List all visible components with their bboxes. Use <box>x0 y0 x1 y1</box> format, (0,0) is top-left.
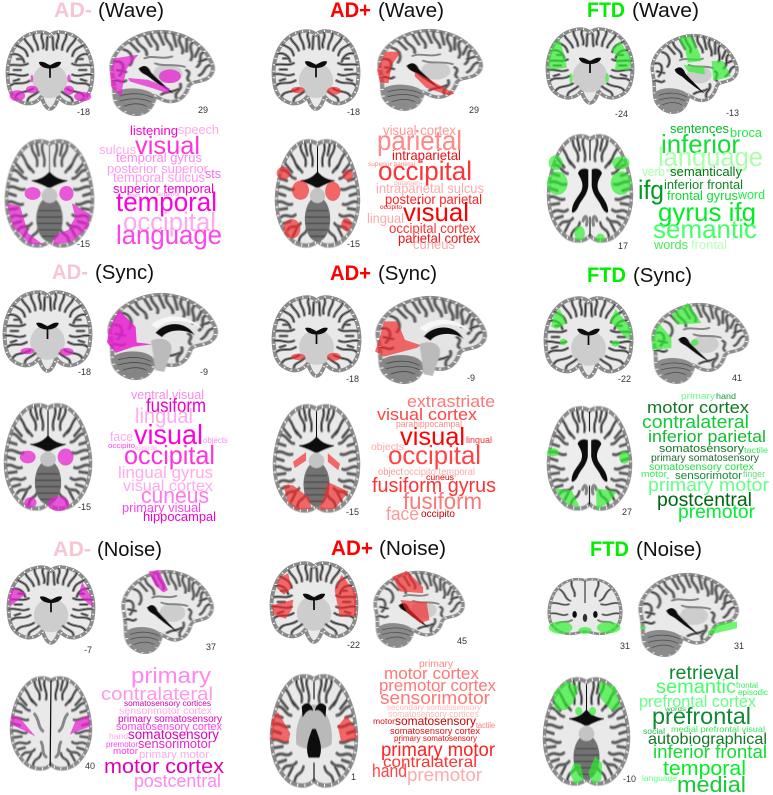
word cloud: FTD Wave: semantically <box>670 164 742 179</box>
word cloud: AD- Noise: contralateral <box>101 683 213 704</box>
word cloud: AD- Wave: occipital <box>123 207 216 237</box>
brain slice: sagittal -9: -9 <box>467 373 475 383</box>
word cloud: AD+ Noise: premotor cortex <box>379 676 496 695</box>
brain slice: sagittal 45 <box>375 571 467 646</box>
word cloud: AD- Sync: occipito <box>108 443 135 450</box>
panel: AD+ Noise <box>271 537 496 785</box>
word cloud: AD+ Noise: somatosensory cortices <box>388 709 479 719</box>
word cloud: FTD Noise: temporal <box>663 758 746 780</box>
brain slice: sagittal 29: 29 <box>198 105 208 115</box>
word cloud: FTD Wave: words <box>653 237 688 252</box>
word cloud: AD+ Wave: posterior parietal <box>385 191 482 207</box>
word cloud: AD+ Noise: motor cortex <box>384 664 479 683</box>
word cloud: AD+ Sync: occipital <box>388 440 481 470</box>
brain slice: coronal -18: -18 <box>346 374 359 384</box>
word cloud: FTD Wave: frontal gyrus <box>667 188 738 203</box>
brain slice: coronal 31: 31 <box>620 641 630 651</box>
brain slice: sagittal 29: 29 <box>469 105 479 115</box>
word cloud: FTD Noise: frontal <box>736 681 758 690</box>
brain slice: sagittal -13: -13 <box>726 108 739 118</box>
word cloud: AD- Sync: primary visual <box>122 500 201 515</box>
brain slice: axial 17: 17 <box>618 241 628 251</box>
brain slice: coronal -18: -18 <box>78 367 91 377</box>
word cloud: AD+ Wave: lingual <box>367 210 404 226</box>
word cloud: FTD Sync: motor cortex <box>647 398 750 417</box>
word cloud: AD- Sync: episodic <box>135 446 157 452</box>
word cloud: AD- Sync: objects <box>203 436 228 445</box>
brain slice: sagittal 41 <box>652 303 747 383</box>
heading: AD- (Noise) <box>53 538 162 561</box>
panel: FTD Noise <box>544 538 768 795</box>
brain slice: sagittal -9: -9 <box>200 367 208 377</box>
word cloud: AD+ Sync: visual cortex <box>377 405 478 424</box>
word cloud: AD- Sync: lingual <box>135 405 193 428</box>
heading: AD- (Sync): AD- <box>52 261 88 284</box>
brain slice: coronal -18: -18 <box>347 107 360 117</box>
word cloud: AD+ Noise: premotor <box>407 765 482 785</box>
word cloud: AD- Noise: motor cortex <box>104 756 224 778</box>
word cloud: AD- Sync <box>108 387 228 524</box>
word cloud: AD- Wave: posterior superior <box>107 161 209 176</box>
word cloud: AD+ Noise: primary somatosensory <box>394 734 477 743</box>
word cloud: AD+ Wave: superior parietal <box>368 162 415 168</box>
panel: FTD Wave <box>547 0 765 252</box>
word cloud: AD+ Wave: putamen <box>394 181 420 187</box>
brain slice: coronal -22 <box>272 563 360 650</box>
word cloud: FTD Noise: words <box>664 706 687 713</box>
brain slice: sagittal 37 <box>123 570 216 652</box>
panel: FTD Sync <box>546 264 769 523</box>
word cloud: AD- Noise: primary <box>131 663 212 688</box>
brain slice: coronal -18 <box>5 292 91 377</box>
word cloud: AD- Sync: occipital <box>124 440 215 470</box>
word cloud: AD+ Noise: primary motor <box>381 740 496 761</box>
word cloud: AD- Sync: face <box>110 429 133 444</box>
heading: AD+ (Sync) <box>330 262 437 285</box>
brain slice: coronal -18: -18 <box>77 107 90 117</box>
brain slice: sagittal 45: 45 <box>457 636 467 646</box>
panel: AD- Sync <box>5 261 228 524</box>
word cloud: AD+ Wave: intraparietal <box>392 147 461 163</box>
brain slice: sagittal 29 <box>110 32 213 115</box>
word cloud: FTD Wave: frontal <box>691 237 727 252</box>
word cloud: FTD Wave: ifg <box>638 175 664 205</box>
brain slice: sagittal 37: 37 <box>206 642 216 652</box>
word cloud: FTD Wave: inferior <box>661 129 740 159</box>
word cloud: FTD Noise: language <box>642 774 678 783</box>
word cloud: AD+ Sync: fusiform <box>403 488 482 514</box>
word cloud: AD- Noise: postcentral <box>134 771 221 791</box>
word cloud: AD+ Wave: visual <box>403 197 469 227</box>
word cloud: FTD Noise: inferior frontal <box>653 742 767 762</box>
heading: AD+ (Noise): (Noise) <box>379 537 446 560</box>
word cloud: FTD Wave <box>638 121 765 252</box>
word cloud: AD+ Noise: tactile <box>476 721 495 730</box>
brain slice: axial 40 <box>11 678 95 771</box>
word cloud: AD- Wave: motion <box>128 193 140 199</box>
word cloud: FTD Sync: contralateral <box>642 412 749 432</box>
word cloud: FTD Sync: somatosensory <box>659 443 745 455</box>
word cloud: FTD Sync: tactile <box>744 446 769 455</box>
brain slice: axial -10 <box>544 679 636 785</box>
heading: FTD (Sync): FTD <box>587 264 626 287</box>
word cloud: AD+ Sync: occipito <box>421 509 455 520</box>
word cloud: AD+ Noise: hand <box>372 761 407 781</box>
word cloud: AD- Noise: primary somatosensory <box>118 714 222 725</box>
brain slice: sagittal 41: 41 <box>732 373 742 383</box>
word cloud: FTD Noise: prefrontal cortex <box>639 692 756 711</box>
heading: AD- (Wave) <box>54 0 164 22</box>
word cloud: AD- Sync: lingual gyrus <box>118 463 213 482</box>
word cloud: AD- Wave: superior temporal <box>113 181 214 196</box>
word cloud: FTD Wave: verb <box>642 164 665 179</box>
word cloud: AD+ Sync: cuneus <box>426 473 454 482</box>
word cloud: AD+ Sync: extrastriate <box>407 392 495 411</box>
word cloud: FTD Sync: premotor <box>678 502 756 523</box>
word cloud: FTD Wave: semantic <box>653 214 757 244</box>
panel: AD- Noise <box>9 538 224 791</box>
word cloud: AD+ Wave <box>367 122 484 252</box>
heading: AD+ (Sync): AD+ <box>330 262 371 285</box>
brain slice: sagittal -9 <box>375 298 485 383</box>
brain slice: sagittal -9 <box>107 295 216 378</box>
heading: FTD (Noise): (Noise) <box>636 538 702 561</box>
word cloud: AD- Noise: sensorimotor cortex <box>119 706 212 717</box>
word cloud: AD+ Sync: object <box>378 467 403 478</box>
brain slice: coronal -24: -24 <box>615 109 628 119</box>
word cloud: FTD Sync: inferior parietal <box>648 427 766 446</box>
word cloud: AD- Wave: speech <box>178 122 219 137</box>
word cloud: FTD Noise: retrieval <box>669 663 739 684</box>
heading: AD- (Noise): (Noise) <box>97 538 162 561</box>
word cloud: AD+ Sync: objects <box>371 442 404 453</box>
word cloud: FTD Sync: motor <box>641 469 667 479</box>
panel: AD- Wave <box>7 0 222 250</box>
word cloud: AD+ Sync <box>371 392 496 524</box>
word cloud: AD+ Sync: face <box>386 504 419 524</box>
brain slice: coronal -18 <box>274 297 359 384</box>
brain slice: axial -15 <box>5 405 91 512</box>
heading: AD+ (Noise): AD+ <box>331 537 373 560</box>
brain slice: axial 1: 1 <box>351 772 356 782</box>
brain slice: coronal -22 <box>546 298 632 384</box>
word cloud: FTD Wave: syntactic <box>666 168 682 174</box>
panel: AD+ Wave <box>274 0 484 252</box>
word cloud: FTD Sync: finger <box>743 469 765 479</box>
word cloud: AD- Sync: visual <box>134 419 203 450</box>
brain slice: coronal -18 <box>274 31 360 117</box>
word cloud: AD- Sync: hippocampal <box>143 509 216 524</box>
word cloud: FTD Sync: postcentral <box>657 490 752 511</box>
word cloud: AD+ Wave: cuneus <box>413 236 455 252</box>
word cloud: AD- Wave: sts <box>205 166 221 181</box>
word cloud: AD- Sync: fusiform <box>146 396 206 417</box>
word cloud: AD+ Noise: secondary somatosensory <box>387 702 482 712</box>
word cloud: FTD Noise <box>639 663 768 795</box>
word cloud: AD- Wave: temporal <box>116 187 217 217</box>
word cloud: AD- Wave: listening <box>130 123 178 138</box>
brain slice: coronal -22: -22 <box>347 640 360 650</box>
heading: FTD (Sync): (Sync) <box>633 264 692 287</box>
word cloud: FTD Sync: primary somatosensory <box>651 453 759 464</box>
word cloud: AD- Noise: premotor <box>106 740 138 749</box>
brain slice: axial 40: 40 <box>85 761 95 771</box>
word cloud: AD- Noise: sensorimotor <box>138 736 213 751</box>
brain slice: coronal -18 <box>8 32 92 117</box>
word cloud: FTD Sync: primary <box>681 391 716 401</box>
brain slice: axial 27: 27 <box>622 507 632 517</box>
heading: AD- (Noise): AD- <box>53 538 91 561</box>
brain slice: axial 1 <box>271 676 357 785</box>
brain slice: coronal -7: -7 <box>84 645 92 655</box>
word cloud: FTD Sync: somatosensory cortex <box>649 462 754 473</box>
word cloud: FTD Noise: autobiographical <box>648 731 767 748</box>
brain slice: coronal -24 <box>548 29 632 119</box>
word cloud: FTD Wave: language <box>658 142 763 172</box>
word cloud: AD+ Noise: contralateral <box>383 754 477 771</box>
heading: FTD (Wave) <box>587 0 699 22</box>
brain slice: sagittal 31: 31 <box>734 641 744 651</box>
heading: AD+ (Noise) <box>331 537 446 560</box>
word cloud: FTD Sync: hand <box>716 391 736 401</box>
word cloud: FTD Wave: sentences <box>670 121 729 136</box>
word cloud: AD+ Sync: occipito temporal <box>404 467 475 478</box>
brain slice: axial -10: -10 <box>623 774 636 784</box>
heading: AD+ (Wave) <box>330 0 444 22</box>
word cloud: FTD Noise: semantic <box>656 677 736 698</box>
word cloud: AD+ Noise: sensorimotor <box>380 688 490 708</box>
word cloud: AD+ Wave: parietal <box>377 125 462 156</box>
word cloud: FTD Wave: inferior frontal <box>664 177 743 192</box>
word cloud: AD- Wave <box>99 122 222 250</box>
word cloud: AD- Noise: somatosensory cortices <box>124 698 211 708</box>
word cloud: AD+ Wave: parietal cortex <box>398 230 480 246</box>
brain slice: axial -15 <box>276 141 360 249</box>
word cloud: AD+ Noise: primary <box>419 659 453 670</box>
word cloud: AD+ Sync: lingual <box>466 435 492 445</box>
brain slice: coronal -22: -22 <box>618 374 631 384</box>
word cloud: FTD Noise: episodic <box>738 688 768 697</box>
word cloud: AD+ Noise: somatosensory cortex <box>390 726 480 737</box>
word cloud: FTD Wave: gyrus ifg <box>658 197 756 227</box>
word cloud: AD+ Noise: somatosensory <box>395 714 476 728</box>
word cloud: AD- Noise: somatosensory cortex <box>116 721 222 733</box>
word cloud: AD- Wave: temporal sulcus <box>113 170 205 185</box>
word cloud: AD+ Sync: visual <box>400 423 465 451</box>
word cloud: AD+ Sync: fusiform gyrus <box>372 475 496 497</box>
word cloud: FTD Noise: social <box>643 727 665 736</box>
word cloud: FTD Noise: prefrontal <box>652 703 751 729</box>
word cloud: AD+ Noise <box>372 659 496 785</box>
brain slice: axial -15 <box>7 141 92 249</box>
brain slice: sagittal 31 <box>640 575 744 655</box>
word cloud: AD- Noise: hand <box>109 732 128 741</box>
word cloud: AD+ Wave: occipito <box>380 205 403 211</box>
brain slice: axial -15: -15 <box>347 239 360 249</box>
word cloud: AD- Noise: somatosensory <box>128 727 219 742</box>
word cloud: AD+ Noise: motor <box>373 717 395 726</box>
brain slice: coronal -7 <box>9 567 93 655</box>
brain slice: sagittal 29 <box>377 30 481 115</box>
word cloud: AD+ Wave: intraparietal sulcus <box>376 180 484 196</box>
word cloud: AD- Sync: visual cortex <box>123 478 213 495</box>
brain slice: axial -15 <box>274 406 359 517</box>
brain slice: axial 27 <box>547 408 632 517</box>
brain slice: axial -15: -15 <box>77 239 90 249</box>
brain slice: axial 17 <box>547 136 632 251</box>
heading: FTD (Noise) <box>590 538 702 561</box>
heading: FTD (Noise): FTD <box>590 538 629 561</box>
word cloud: FTD Sync: primary motor <box>648 475 769 495</box>
word cloud: AD- Wave: sulcus <box>99 142 136 157</box>
heading: AD- (Sync): (Sync) <box>95 261 154 284</box>
word cloud: AD+ Wave: visual cortex <box>383 122 456 138</box>
brain slice: axial -15: -15 <box>78 502 91 512</box>
word cloud: AD+ Sync: parahippocampal <box>396 419 462 429</box>
word cloud: AD- Sync: cuneus <box>141 483 209 508</box>
word cloud: FTD Wave: word <box>737 187 765 202</box>
word cloud: AD- Wave: visual <box>135 132 200 160</box>
word cloud: AD+ Wave: occipital <box>378 156 472 186</box>
word cloud: AD+ Wave: occipital cortex <box>389 220 476 236</box>
word cloud: AD- Noise: motor <box>113 746 138 756</box>
word cloud: FTD Sync: sensorimotor <box>675 470 742 482</box>
word cloud: AD- Wave: language <box>116 220 222 250</box>
brain slice: axial -15: -15 <box>346 507 359 517</box>
word cloud: AD- Sync: ventral visual <box>131 387 204 402</box>
brain slice: coronal 31 <box>549 579 630 651</box>
word cloud: AD- Noise: primary motor <box>139 749 209 761</box>
word cloud: FTD Sync <box>641 391 769 523</box>
heading: AD+ (Sync): (Sync) <box>378 262 437 285</box>
panel: AD+ Sync <box>274 262 496 524</box>
word cloud: FTD Wave: broca <box>730 125 763 140</box>
word cloud: AD- Noise <box>101 663 224 791</box>
word cloud: AD- Wave: superior <box>157 192 180 198</box>
heading: FTD (Sync) <box>587 264 692 287</box>
brain slice: sagittal -13 <box>652 35 739 118</box>
word cloud: AD- Wave: temporal gyrus <box>116 150 202 165</box>
word cloud: FTD Noise: medial prefrontal visual <box>671 725 765 734</box>
heading: AD- (Sync) <box>52 261 154 284</box>
